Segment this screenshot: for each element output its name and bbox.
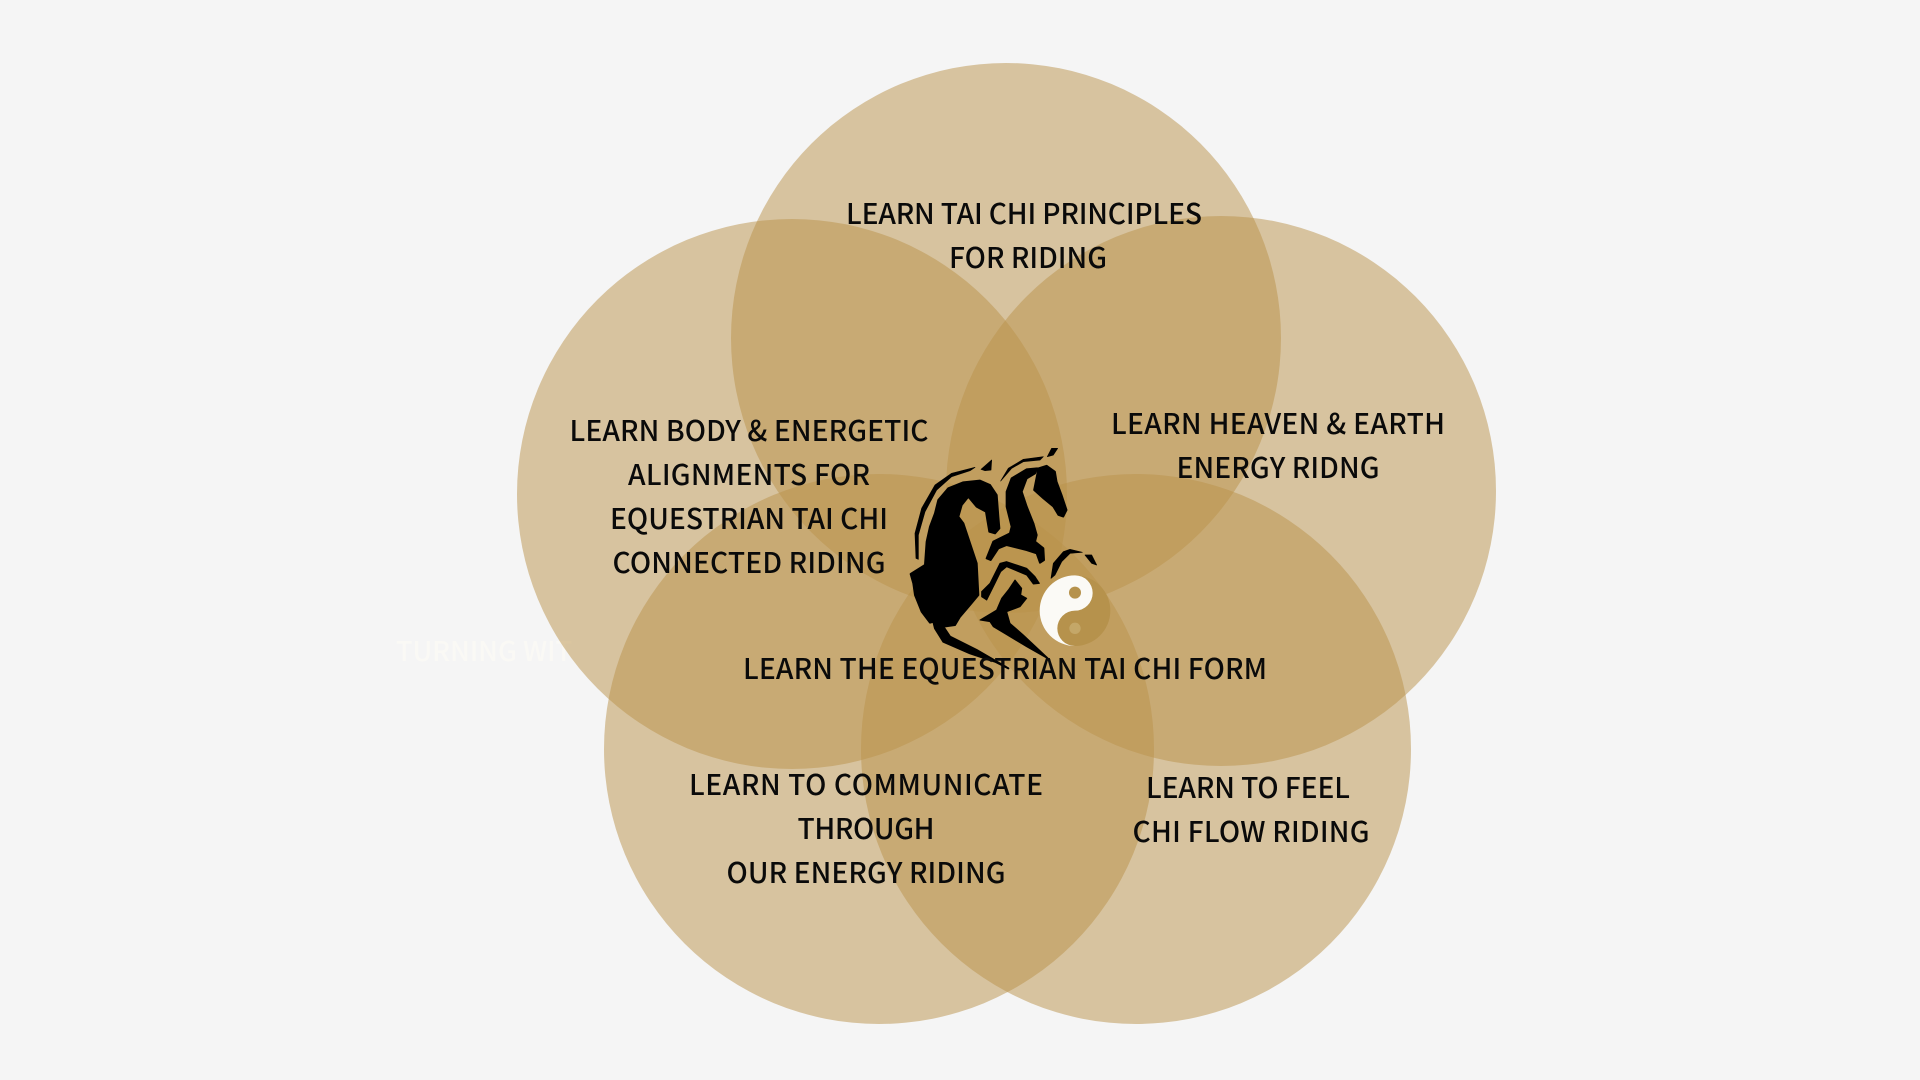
circle: right — [946, 216, 1496, 766]
label: right circle — [1111, 402, 1445, 487]
horse neck and chest — [987, 468, 1044, 563]
icon: yin-yang — [1040, 575, 1110, 646]
circle: left — [517, 219, 1067, 769]
icon: horse and rider silhouette with yin-yang — [911, 448, 1110, 668]
horse hind shape — [980, 580, 1050, 660]
label: top circle: LEARN TAI CHI PRINCIPLES — [846, 192, 1202, 233]
label: top circle — [846, 192, 1202, 277]
horse head — [1034, 466, 1067, 517]
label: left circle: LEARN BODY & ENERGETIC — [570, 409, 928, 450]
label: left circle: EQUESTRIAN TAI CHI — [610, 497, 888, 538]
venn diagram circles — [517, 63, 1496, 1024]
label: center: LEARN THE EQUESTRIAN TAI CHI FORM — [743, 647, 1267, 688]
label: left circle — [570, 409, 928, 582]
label: bottom right circle — [1132, 766, 1370, 851]
circle: bottom left — [604, 474, 1154, 1024]
label: left circle: CONNECTED RIDING — [612, 541, 886, 582]
horse foreleg — [982, 562, 1039, 600]
label: left circle: ALIGNMENTS FOR — [628, 453, 870, 494]
label: bottom left circle: OUR ENERGY RIDING — [726, 851, 1006, 892]
small arcs above yin-yang — [1051, 549, 1097, 578]
label: right circle: ENERGY RIDNG — [1176, 446, 1380, 487]
rider body — [911, 481, 1008, 668]
circle: top — [731, 63, 1281, 613]
label: bottom left circle — [689, 763, 1043, 892]
circle: bottom right — [861, 474, 1411, 1024]
label: bottom left circle: THROUGH — [798, 807, 934, 848]
label: bottom right circle: CHI FLOW RIDING — [1132, 810, 1370, 851]
rider arc — [915, 448, 1058, 559]
label: bottom left circle: LEARN TO COMMUNICATE — [689, 763, 1043, 804]
label: bottom right circle: LEARN TO FEEL — [1146, 766, 1350, 807]
faint background text: TURNING WIT — [396, 630, 572, 669]
label: right circle: LEARN HEAVEN & EARTH — [1111, 402, 1445, 443]
label: top circle: FOR RIDING — [949, 236, 1107, 277]
